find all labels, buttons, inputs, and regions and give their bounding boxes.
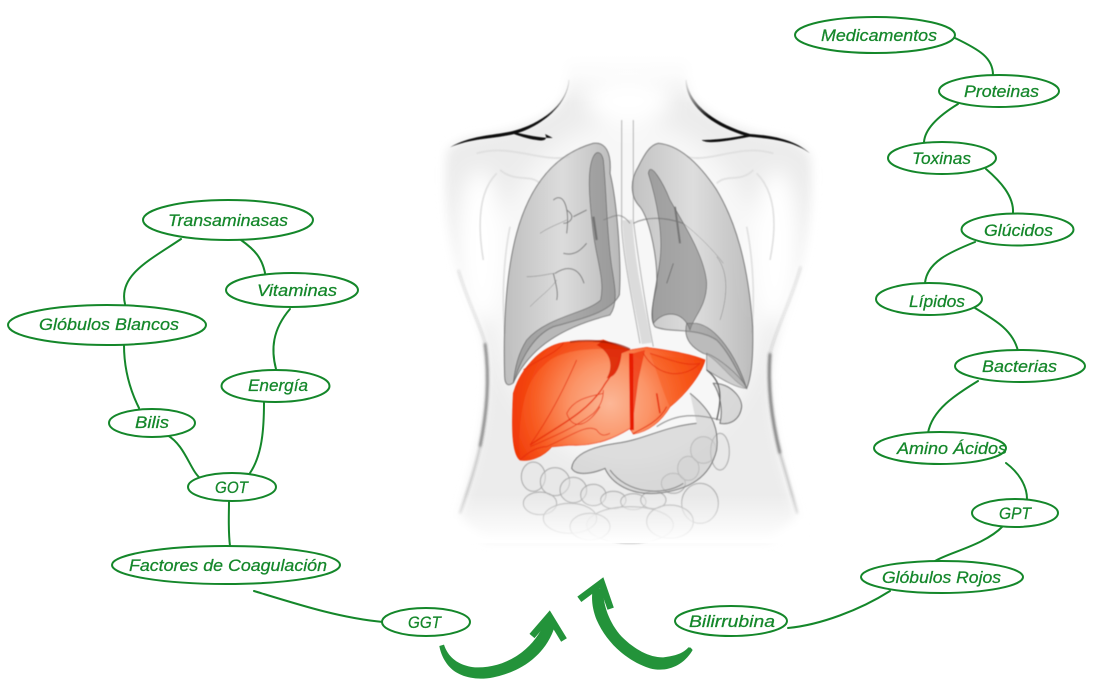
node: Glúcidos <box>962 214 1074 246</box>
node: Glóbulos Blancos <box>8 305 206 345</box>
node: GOT: GOT <box>215 478 249 497</box>
node: Transaminasas <box>143 200 313 240</box>
node: Energía <box>222 370 330 402</box>
node: Transaminasas: Transaminasas <box>168 211 289 230</box>
torso <box>446 60 811 540</box>
node: Vitaminas: Vitaminas <box>257 281 338 300</box>
node: Energía: Energía <box>248 376 308 395</box>
node: Bacterias <box>955 350 1085 382</box>
arrow: right sweeping up <box>579 583 693 670</box>
body illustration <box>443 47 811 543</box>
left lung <box>504 143 620 385</box>
node: Bilis: Bilis <box>135 413 170 432</box>
bottom fade <box>443 493 810 543</box>
node: Toxinas: Toxinas <box>912 149 972 168</box>
node: GGT: GGT <box>408 613 442 632</box>
esophagus <box>622 120 653 347</box>
node: Lípidos <box>876 283 982 315</box>
body side shadows <box>458 267 801 513</box>
node: Amino Ácidos <box>874 432 1008 464</box>
node: Bilirrubina: Bilirrubina <box>689 612 775 631</box>
node: Lípidos: Lípidos <box>909 292 966 311</box>
skeleton hints <box>477 150 774 333</box>
node: Factores de Coagulación: Factores de Coagulación <box>129 556 327 575</box>
node: Toxinas <box>888 142 996 174</box>
stomach and spleen <box>572 353 747 493</box>
liver <box>512 340 705 460</box>
node: Glóbulos Rojos <box>861 561 1023 593</box>
node: Glóbulos Rojos: Glóbulos Rojos <box>882 568 1002 587</box>
node: Bacterias: Bacterias <box>982 357 1058 376</box>
node: Medicamentos <box>795 17 955 53</box>
node: Bilis <box>109 409 195 437</box>
chest highlights <box>457 77 800 467</box>
node: Proteinas: Proteinas <box>964 82 1040 101</box>
node: Proteinas <box>939 75 1059 107</box>
node: Vitaminas <box>226 273 358 307</box>
node: Factores de Coagulación <box>112 546 340 584</box>
shoulder and neck shadows <box>450 80 810 153</box>
node: Amino Ácidos: Amino Ácidos <box>896 439 1008 458</box>
internal organs <box>504 120 753 543</box>
node: Medicamentos: Medicamentos <box>821 26 938 45</box>
node: GOT <box>188 473 276 501</box>
node: Glóbulos Blancos: Glóbulos Blancos <box>39 315 180 334</box>
node: GGT <box>382 608 470 636</box>
connectors <box>124 38 1027 628</box>
node: Bilirrubina <box>675 606 787 636</box>
node: GPT <box>972 499 1058 527</box>
node: GPT: GPT <box>999 504 1032 523</box>
intestines <box>521 433 729 543</box>
right lung <box>603 143 753 388</box>
node: Glúcidos: Glúcidos <box>984 221 1054 240</box>
arrow: left sweeping up <box>439 616 564 679</box>
neck fade <box>543 47 713 103</box>
